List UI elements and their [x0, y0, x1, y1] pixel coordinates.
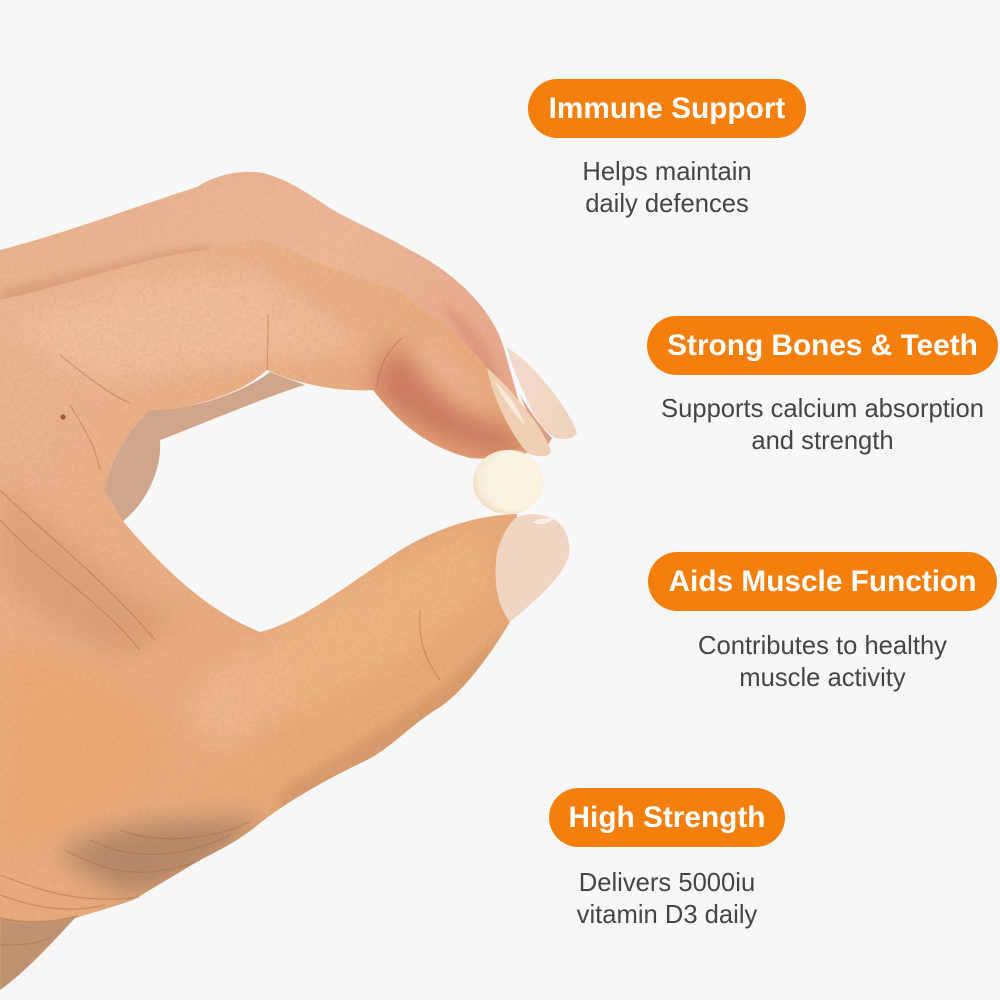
- palm and fingers: [0, 230, 530, 1000]
- badge: High Strength: [549, 788, 785, 847]
- back finger: [0, 160, 577, 445]
- badge: Strong Bones & Teeth: Strong Bones & Teeth: [667, 329, 978, 362]
- text: Aids Muscle description: [698, 632, 947, 692]
- back fingernail: [507, 347, 577, 439]
- thumbnail: [496, 514, 570, 622]
- badge: Immune Support: Immune Support: [549, 92, 785, 125]
- skin texture: [0, 242, 494, 916]
- palm colour: [0, 645, 152, 840]
- text: High Strength description: vitamin D3 daily: [577, 901, 757, 929]
- badge: Strong Bones & Teeth: [647, 316, 998, 375]
- fingertip shading: [375, 349, 530, 458]
- text: High Strength description: Delivers 5000iu: [579, 869, 755, 897]
- text: Aids Muscle description: muscle activity: [739, 664, 906, 692]
- badge: Aids Muscle Function: [648, 552, 997, 611]
- back finger shading: [0, 244, 212, 300]
- thumb base highlight: [195, 660, 268, 739]
- mole: [60, 414, 66, 420]
- web between finger and thumb: [100, 372, 305, 522]
- front fingernail: [487, 368, 551, 456]
- finger highlight: [34, 273, 355, 378]
- side of palm shading: [0, 493, 162, 654]
- thumb underside shade: [280, 641, 498, 809]
- skin creases: [0, 315, 440, 945]
- nail bed shadow: [520, 395, 552, 445]
- text: High Strength description: [576, 869, 758, 929]
- text: Strong Bones description: Supports calcium absorption: [661, 395, 984, 423]
- wrist shadow: [0, 916, 77, 990]
- wrinkled shadow: [60, 815, 265, 895]
- text: Strong Bones description: and strength: [751, 427, 894, 455]
- badge: Aids Muscle Function: Aids Muscle Function: [669, 565, 976, 598]
- badge: Immune Support: [528, 79, 806, 138]
- text: Immune Support description: daily defences: [585, 190, 749, 218]
- badge: High Strength: High Strength: [569, 801, 765, 834]
- text: Immune Support description: Helps maintain: [582, 158, 752, 186]
- text: Strong Bones description: [661, 395, 984, 455]
- text: Immune Support description: [582, 158, 752, 218]
- text: Aids Muscle description: Contributes to healthy: [698, 632, 947, 660]
- hand holding tablet: [0, 172, 577, 990]
- tablet: [473, 450, 543, 514]
